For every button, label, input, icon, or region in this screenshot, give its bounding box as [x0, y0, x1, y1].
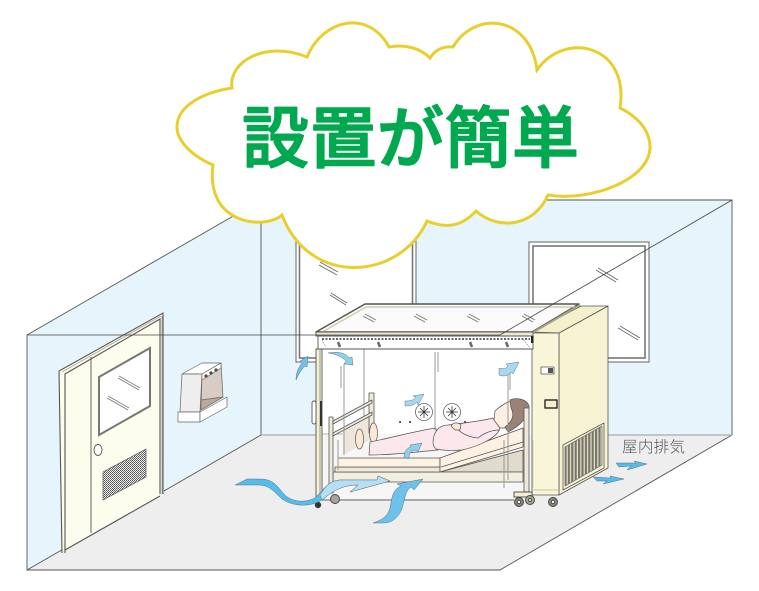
exhaust grille — [563, 423, 604, 490]
air handling unit — [524, 306, 608, 495]
arrow: floor intake — [235, 476, 390, 505]
control panel — [541, 367, 554, 374]
handle — [312, 401, 316, 424]
switch — [545, 400, 557, 408]
feet — [356, 429, 364, 449]
door window — [99, 348, 150, 435]
window left — [296, 235, 416, 362]
arrow: on bed — [404, 443, 422, 458]
cloud callout — [177, 23, 650, 268]
face — [494, 401, 518, 428]
arrow: mid — [405, 394, 424, 406]
wall-mounted small unit — [178, 363, 227, 422]
hair — [505, 399, 529, 432]
arrow: floor rising — [373, 479, 423, 523]
casters — [315, 492, 558, 508]
legs — [369, 428, 438, 455]
bed rail foot — [329, 417, 333, 493]
torso — [433, 418, 500, 450]
door knob — [94, 444, 102, 456]
bed — [329, 393, 523, 493]
arrow: wall left — [296, 356, 308, 380]
title: 設置が簡単 — [242, 102, 579, 177]
arrow: right top — [499, 362, 519, 376]
door — [59, 312, 164, 553]
arm — [456, 427, 499, 438]
booth interior — [322, 349, 532, 500]
ceiling edge lines — [27, 200, 732, 335]
right bed post — [524, 408, 529, 492]
arrow: exhaust upper — [616, 461, 647, 470]
fans — [416, 404, 460, 420]
window right — [529, 242, 649, 362]
room: walls and floor — [27, 200, 732, 570]
left post — [316, 349, 322, 499]
label: indoor exhaust: 屋内排気 — [622, 438, 685, 456]
arrow: top curved — [328, 352, 353, 365]
airflow arrows — [235, 352, 647, 523]
glass reflections — [338, 352, 533, 488]
canopy and lamp box — [312, 304, 580, 500]
door louver — [103, 449, 146, 500]
arrow: exhaust lower — [593, 476, 624, 484]
patient — [356, 399, 529, 455]
hands — [451, 423, 461, 430]
